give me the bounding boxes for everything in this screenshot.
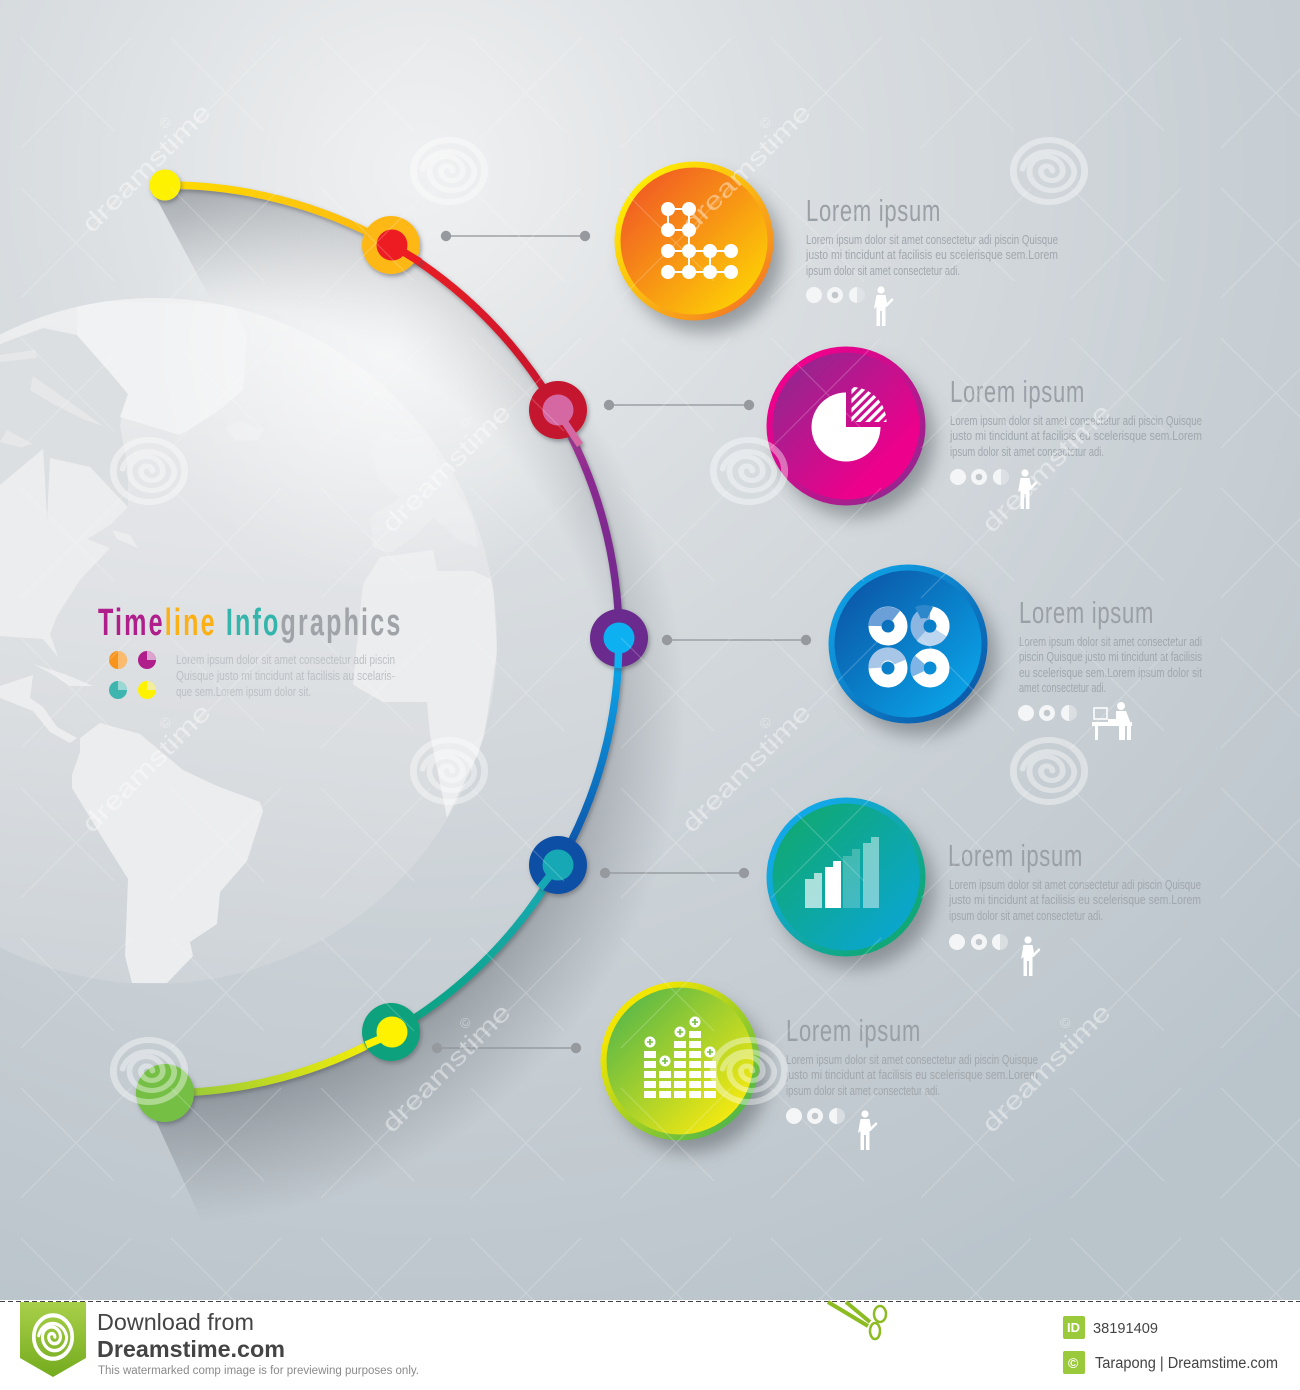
step 3 text: Lorem ipsum dolor sit amet consectetur adi — [1019, 635, 1202, 649]
watermark wordmarks: © — [156, 713, 175, 732]
globe — [0, 298, 497, 984]
step 4 text: justo mi tincidunt at facilisis eu scelerisque sem.Lorem — [948, 893, 1201, 907]
step 1 badge — [614, 162, 782, 332]
step 4 text: Lorem ipsum dolor sit amet consectetur adi piscin Quisque — [949, 878, 1201, 892]
watermark wordmarks: dreamstime — [976, 998, 1116, 1138]
id badge: ID — [1067, 1320, 1080, 1335]
step 3 badge — [828, 564, 996, 735]
step 1 text: justo mi tincidunt at facilisis eu scelerisque sem.Lorem — [805, 248, 1058, 262]
watermark wordmarks: dreamstime — [376, 998, 516, 1138]
watermark wordmarks: dreamstime — [676, 698, 816, 838]
logo badge — [20, 1302, 86, 1377]
watermark wordmarks: © — [456, 1013, 475, 1032]
intro text: Quisque justo mi tincidunt at facilisis au scelaris- — [176, 669, 395, 683]
id badge: 38191409 — [1093, 1321, 1158, 1337]
watermark wordmarks — [76, 98, 1116, 1138]
download text: This watermarked comp image is for previewing purposes only. — [98, 1365, 419, 1377]
step 2 rating dots and figure — [950, 469, 1038, 509]
watermark wordmarks: dreamstime — [376, 398, 516, 538]
highlight inside arc — [229, 200, 563, 484]
step 5 rating dots and figure — [786, 1108, 878, 1150]
step 2 text: ipsum dolor sit amet consectetur adi. — [950, 445, 1104, 459]
step 1 text: Lorem ipsum — [806, 193, 941, 228]
icon: equalizer bars — [644, 1016, 716, 1098]
step 3 text: amet consectetur adi. — [1019, 681, 1106, 695]
icon: network grid — [662, 203, 737, 278]
step 2 text: Lorem ipsum — [950, 374, 1085, 409]
step 1 rating dots and figure — [806, 286, 894, 326]
watermark wordmarks: © — [756, 113, 775, 132]
step 3 text: piscin Quisque justo mi tincidunt at facilisis — [1019, 650, 1202, 664]
watermark spirals — [113, 140, 1085, 1102]
icon: four donuts — [875, 612, 943, 681]
intro text: Lorem ipsum dolor sit amet consectetur adi piscin — [176, 653, 395, 667]
intro text: que sem.Lorem ipsum dolor sit. — [176, 685, 311, 699]
step 2 text: justo mi tincidunt at facilisis eu scelerisque sem.Lorem — [949, 429, 1202, 443]
timeline arc — [165, 185, 619, 1093]
step 3 text — [1019, 595, 1202, 695]
watermark wordmarks: dreamstime — [76, 698, 216, 838]
step 4 text: Lorem ipsum — [948, 838, 1083, 873]
step 5 badge — [600, 982, 768, 1152]
long shadow below arc — [156, 432, 666, 1202]
watermark wordmarks: © — [1056, 1013, 1075, 1032]
author badge: © — [1068, 1355, 1079, 1371]
connector lines — [432, 231, 811, 1053]
footer band — [0, 1300, 1300, 1390]
download text — [97, 1309, 419, 1377]
step 5 text — [785, 1013, 1038, 1098]
long shadow under top arc — [156, 190, 614, 610]
icon: stepped bars — [805, 837, 879, 908]
watermark wordmarks: © — [1056, 413, 1075, 432]
download text: Download from — [97, 1309, 254, 1335]
step 4 text — [948, 838, 1201, 923]
author badge — [1063, 1351, 1278, 1374]
legend pies — [109, 651, 156, 699]
watermark wordmarks: dreamstime — [676, 98, 816, 238]
author badge: Tarapong | Dreamstime.com — [1095, 1355, 1278, 1372]
watermark wordmarks: dreamstime — [976, 398, 1116, 538]
icon: scissors — [828, 1302, 886, 1339]
step 4 badge — [766, 798, 934, 968]
step 2 badge — [766, 346, 934, 517]
continents — [0, 300, 497, 983]
intro text — [176, 653, 395, 699]
watermark wordmarks: © — [756, 713, 775, 732]
step 5 text: Lorem ipsum dolor sit amet consectetur adi piscin Quisque — [786, 1053, 1038, 1067]
step 3 text: eu scelerisque sem.Lorem ipsum dolor sit — [1019, 666, 1202, 680]
step 4 text: ipsum dolor sit amet consectetur adi. — [949, 909, 1103, 923]
watermark wordmarks: © — [456, 413, 475, 432]
id badge — [1063, 1316, 1158, 1339]
step 1 text: Lorem ipsum dolor sit amet consectetur adi piscin Quisque — [806, 233, 1058, 247]
title: Timeline Infographics — [98, 601, 402, 643]
step 3 rating dots and desk figure — [1018, 702, 1132, 740]
icon: pie chart — [812, 387, 886, 462]
download text: Dreamstime.com — [97, 1336, 285, 1362]
step 4 rating dots and figure — [949, 934, 1040, 976]
watermark wordmarks: dreamstime — [76, 98, 216, 238]
step 1 text — [805, 193, 1058, 278]
step 5 text: ipsum dolor sit amet consectetur adi. — [786, 1084, 940, 1098]
step 2 text: Lorem ipsum dolor sit amet consectetur adi piscin Quisque — [950, 414, 1202, 428]
step 2 text — [949, 374, 1202, 459]
step 3 text: Lorem ipsum — [1019, 595, 1154, 630]
step 5 text: justo mi tincidunt at facilisis eu scelerisque sem.Lorem — [785, 1068, 1038, 1082]
half disc inside arc — [179, 438, 614, 1088]
watermark wordmarks: © — [156, 113, 175, 132]
step 5 text: Lorem ipsum — [786, 1013, 921, 1048]
step 1 text: ipsum dolor sit amet consectetur adi. — [806, 264, 960, 278]
timeline nodes — [136, 170, 648, 1122]
